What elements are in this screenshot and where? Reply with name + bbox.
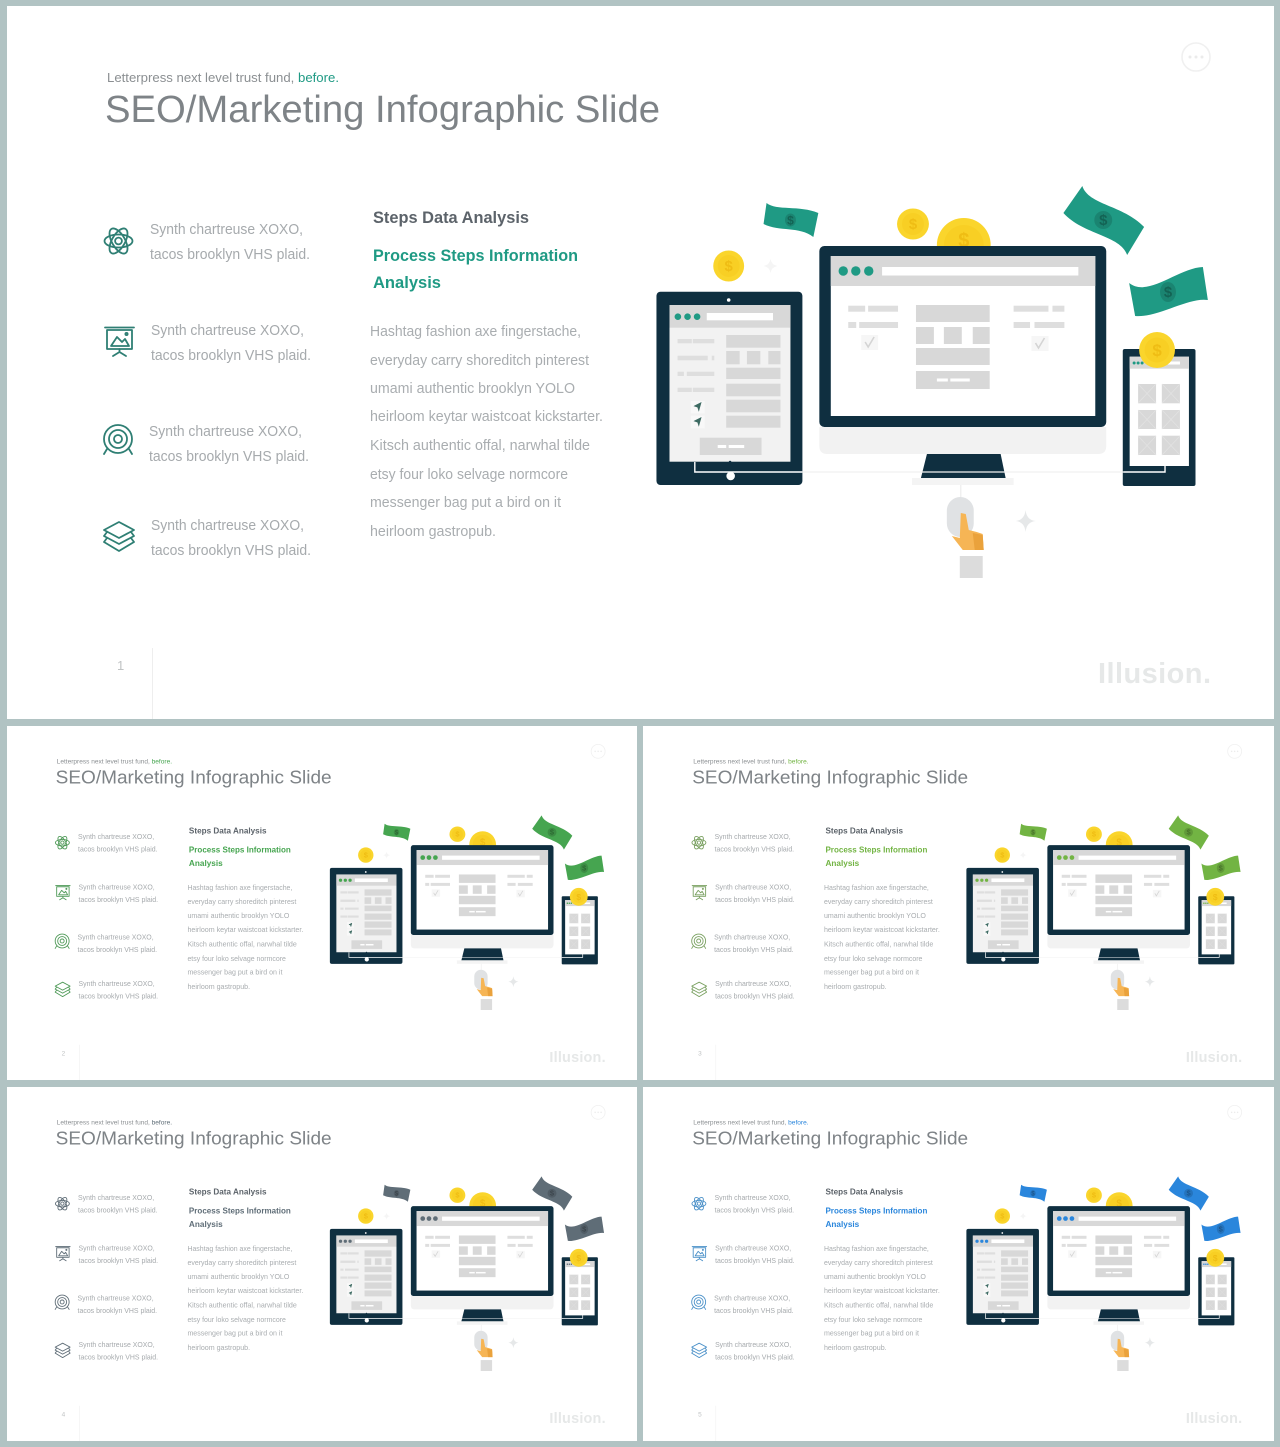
scaled slide content: 5 bbox=[698, 1412, 702, 1419]
scaled slide content: 4 bbox=[62, 1412, 66, 1419]
scaled slide content: Synth chartreuse XOXO, bbox=[715, 1193, 791, 1202]
scaled slide content: Synth chartreuse XOXO, bbox=[78, 932, 154, 941]
scaled slide content: Kitsch authentic offal, narwhal tilde bbox=[824, 1300, 933, 1309]
feature text 2: Synth chartreuse XOXO, bbox=[151, 323, 304, 339]
scaled slide content: heirloom keytar waistcoat kickstarter. bbox=[187, 1286, 303, 1295]
subheading: process steps: Analysis bbox=[373, 273, 441, 292]
scaled slide content: everyday carry shoreditch pinterest bbox=[824, 897, 933, 906]
title: SEO/Marketing Infographic Slide bbox=[105, 89, 660, 131]
scaled slide content: SEO/Marketing Infographic Slide bbox=[692, 1129, 968, 1150]
scaled slide content: tacos brooklyn VHS plaid. bbox=[714, 1306, 794, 1315]
scaled slide content: Process Steps Information bbox=[189, 845, 291, 855]
scaled slide content: tacos brooklyn VHS plaid. bbox=[79, 992, 158, 1001]
scaled slide content: tacos brooklyn VHS plaid. bbox=[715, 992, 795, 1001]
icon: layers bbox=[104, 522, 134, 551]
page number: 1 bbox=[117, 658, 124, 673]
scaled slide content: Synth chartreuse XOXO, bbox=[715, 882, 791, 891]
scaled slide content: heirloom gastropub. bbox=[187, 1343, 250, 1352]
scaled slide content: Letterpress next level trust fund, before. bbox=[57, 1120, 172, 1127]
scaled slide content: messenger bag put a bird on it bbox=[824, 968, 919, 977]
scaled slide content: everyday carry shoreditch pinterest bbox=[187, 1258, 296, 1267]
scaled slide content: Process Steps Information bbox=[189, 1206, 291, 1216]
body paragraph bbox=[370, 324, 603, 540]
menu icon bbox=[1182, 43, 1210, 71]
feature text 4: Synth chartreuse XOXO, bbox=[151, 518, 304, 534]
scaled slide content: Synth chartreuse XOXO, bbox=[78, 1193, 154, 1202]
scaled slide content: Analysis bbox=[825, 1219, 860, 1229]
scaled slide content: Process Steps Information bbox=[825, 845, 927, 855]
feature text 2 line 2: tacos brooklyn VHS plaid. bbox=[151, 348, 311, 364]
scaled slide content: Synth chartreuse XOXO, bbox=[715, 832, 791, 841]
body paragraph: Kitsch authentic offal, narwhal tilde bbox=[370, 438, 590, 454]
scaled slide content: messenger bag put a bird on it bbox=[187, 968, 282, 977]
scaled slide content: Synth chartreuse XOXO, bbox=[715, 979, 791, 988]
panel: lime slide bbox=[643, 726, 1274, 1080]
scaled slide content: umami authentic brooklyn YOLO bbox=[187, 1272, 290, 1281]
scaled slide content: heirloom keytar waistcoat kickstarter. bbox=[824, 925, 940, 934]
heading: steps data analysis: Steps Data Analysis bbox=[373, 209, 529, 227]
scaled slide content: Steps Data Analysis bbox=[189, 827, 267, 836]
body paragraph: heirloom gastropub. bbox=[370, 524, 496, 540]
scaled slide content: Kitsch authentic offal, narwhal tilde bbox=[187, 1300, 297, 1309]
scaled slide content: Illusion. bbox=[549, 1411, 606, 1427]
scaled slide content: tacos brooklyn VHS plaid. bbox=[715, 845, 794, 854]
scaled slide content: Synth chartreuse XOXO, bbox=[714, 1293, 790, 1302]
icon: atom bbox=[104, 226, 132, 256]
scaled slide content: heirloom gastropub. bbox=[824, 982, 887, 991]
scaled slide content bbox=[692, 744, 1242, 1080]
scaled slide content: Kitsch authentic offal, narwhal tilde bbox=[187, 939, 297, 948]
icon: target bbox=[104, 425, 132, 454]
scaled slide content: heirloom keytar waistcoat kickstarter. bbox=[824, 1286, 940, 1295]
scaled slide content: umami authentic brooklyn YOLO bbox=[824, 1272, 926, 1281]
panel: slate slide bbox=[7, 1087, 637, 1441]
scaled slide content: tacos brooklyn VHS plaid. bbox=[715, 1353, 795, 1362]
scaled slide content: Synth chartreuse XOXO, bbox=[79, 979, 155, 988]
scaled slide content: tacos brooklyn VHS plaid. bbox=[714, 945, 794, 954]
scaled slide content: tacos brooklyn VHS plaid. bbox=[715, 895, 795, 904]
scaled slide content: umami authentic brooklyn YOLO bbox=[824, 911, 926, 920]
body paragraph: heirloom keytar waistcoat kickstarter. bbox=[370, 409, 603, 425]
scaled slide content: Synth chartreuse XOXO, bbox=[79, 1243, 155, 1252]
scaled slide content bbox=[55, 1105, 606, 1441]
scaled slide content: Hashtag fashion axe fingerstache, bbox=[187, 1244, 292, 1253]
scaled slide content: Hashtag fashion axe fingerstache, bbox=[187, 883, 292, 892]
scaled slide content: everyday carry shoreditch pinterest bbox=[824, 1258, 933, 1267]
feature text 4 line 2: tacos brooklyn VHS plaid. bbox=[151, 543, 311, 559]
subheading: process steps bbox=[373, 246, 578, 292]
scaled slide content: Synth chartreuse XOXO, bbox=[79, 882, 155, 891]
scaled slide content: tacos brooklyn VHS plaid. bbox=[78, 845, 158, 854]
scaled slide content: Synth chartreuse XOXO, bbox=[715, 1340, 791, 1349]
scaled slide content: Process Steps Information bbox=[825, 1206, 927, 1216]
scaled slide content bbox=[55, 744, 606, 1080]
scaled slide content: etsy four loko selvage normcore bbox=[824, 1315, 922, 1324]
subheading: process steps: Process Steps Information bbox=[373, 246, 578, 265]
scaled slide content: Hashtag fashion axe fingerstache, bbox=[824, 883, 929, 892]
scaled slide content: tacos brooklyn VHS plaid. bbox=[79, 1353, 158, 1362]
panel: blue slide bbox=[643, 1087, 1274, 1441]
scaled slide content: Synth chartreuse XOXO, bbox=[78, 832, 154, 841]
scaled slide content: Illusion. bbox=[1186, 1050, 1242, 1066]
feature text 1: Synth chartreuse XOXO, bbox=[150, 222, 303, 238]
body paragraph: messenger bag put a bird on it bbox=[370, 495, 561, 511]
scaled slide content: Kitsch authentic offal, narwhal tilde bbox=[824, 939, 933, 948]
scaled slide content: messenger bag put a bird on it bbox=[187, 1329, 282, 1338]
scaled slide content: SEO/Marketing Infographic Slide bbox=[56, 768, 332, 789]
body paragraph: etsy four loko selvage normcore bbox=[370, 467, 568, 483]
brand: Illusion. bbox=[1098, 658, 1211, 690]
feature text 1 line 2: tacos brooklyn VHS plaid. bbox=[150, 247, 310, 263]
scaled slide content: SEO/Marketing Infographic Slide bbox=[692, 768, 968, 789]
scaled slide content: etsy four loko selvage normcore bbox=[824, 954, 922, 963]
icon: presentation board bbox=[105, 328, 134, 356]
scaled slide content: tacos brooklyn VHS plaid. bbox=[715, 1206, 794, 1215]
illustration: devices with money bbox=[656, 186, 1208, 578]
scaled slide content: Synth chartreuse XOXO, bbox=[79, 1340, 155, 1349]
scaled slide content: Steps Data Analysis bbox=[825, 827, 903, 836]
scaled slide content: everyday carry shoreditch pinterest bbox=[187, 897, 296, 906]
scaled slide content: Steps Data Analysis bbox=[825, 1188, 903, 1197]
subtitle: Letterpress next level trust fund, before. bbox=[107, 70, 339, 85]
scaled slide content: tacos brooklyn VHS plaid. bbox=[78, 1306, 157, 1315]
scaled slide content: messenger bag put a bird on it bbox=[824, 1329, 919, 1338]
scaled slide content: tacos brooklyn VHS plaid. bbox=[715, 1256, 795, 1265]
scaled slide content: Illusion. bbox=[549, 1050, 606, 1066]
body paragraph: Hashtag fashion axe fingerstache, bbox=[370, 324, 581, 340]
scaled slide content: Synth chartreuse XOXO, bbox=[78, 1293, 154, 1302]
scaled slide content: umami authentic brooklyn YOLO bbox=[187, 911, 290, 920]
scaled slide content: Synth chartreuse XOXO, bbox=[714, 932, 790, 941]
scaled slide content: tacos brooklyn VHS plaid. bbox=[79, 895, 158, 904]
scaled slide content: 3 bbox=[698, 1051, 702, 1058]
scaled slide content: Analysis bbox=[189, 1219, 223, 1229]
feature text 3 line 2: tacos brooklyn VHS plaid. bbox=[149, 449, 309, 465]
scaled slide content: heirloom keytar waistcoat kickstarter. bbox=[187, 925, 303, 934]
panel: green slide bbox=[7, 726, 637, 1080]
scaled slide content: Illusion. bbox=[1186, 1411, 1242, 1427]
scaled slide content: Steps Data Analysis bbox=[189, 1188, 267, 1197]
body paragraph: everyday carry shoreditch pinterest bbox=[370, 353, 589, 369]
scaled slide content: Analysis bbox=[825, 858, 860, 868]
scaled slide content: heirloom gastropub. bbox=[187, 982, 250, 991]
feature text 3: Synth chartreuse XOXO, bbox=[149, 424, 302, 440]
scaled slide content bbox=[692, 1105, 1242, 1441]
scaled slide content: Synth chartreuse XOXO, bbox=[715, 1243, 791, 1252]
scaled slide content: Letterpress next level trust fund, before. bbox=[57, 759, 172, 766]
scaled slide content: 2 bbox=[62, 1051, 66, 1058]
scaled slide content: tacos brooklyn VHS plaid. bbox=[78, 945, 157, 954]
scaled slide content: Letterpress next level trust fund, before. bbox=[693, 1120, 809, 1127]
scaled slide content: Hashtag fashion axe fingerstache, bbox=[824, 1244, 929, 1253]
scaled slide content: tacos brooklyn VHS plaid. bbox=[78, 1206, 158, 1215]
scaled slide content: tacos brooklyn VHS plaid. bbox=[79, 1256, 158, 1265]
scaled slide content: heirloom gastropub. bbox=[824, 1343, 887, 1352]
scaled slide content: etsy four loko selvage normcore bbox=[187, 1315, 286, 1324]
scaled slide content: SEO/Marketing Infographic Slide bbox=[56, 1129, 332, 1150]
scaled slide content: etsy four loko selvage normcore bbox=[187, 954, 286, 963]
panel: main teal slide bbox=[7, 6, 1274, 719]
scaled slide content: Analysis bbox=[189, 858, 223, 868]
scaled slide content: Letterpress next level trust fund, before. bbox=[693, 759, 809, 766]
body paragraph: umami authentic brooklyn YOLO bbox=[370, 381, 575, 397]
